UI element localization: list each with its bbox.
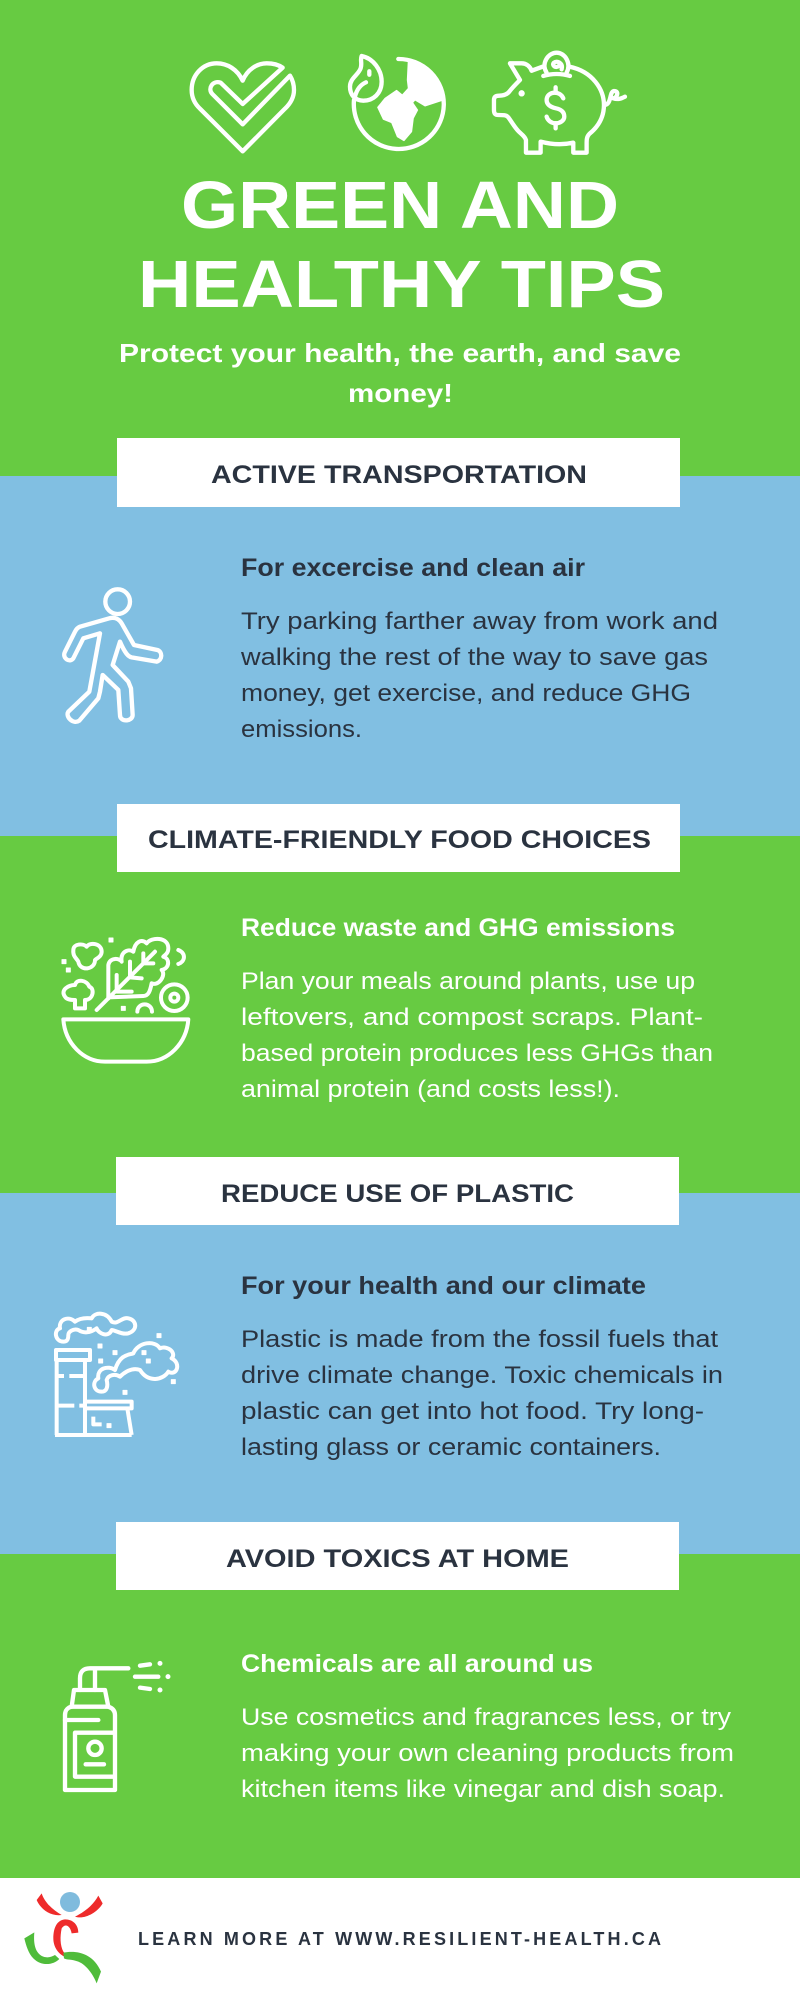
body text: making your own cleaning products from [241,1740,734,1767]
icon: salad bowl [62,938,188,1062]
body text: based protein produces less GHGs than [241,1040,713,1067]
subheading: Chemicals are all around us [241,1650,593,1678]
heading bar: toxics [116,1522,679,1590]
panel: reduce use of plastic [0,1157,800,1554]
subtitle: money! [348,378,453,408]
panel: footer [0,1878,800,2000]
body text: Try parking farther away from work and [241,608,718,635]
subtitle: Protect your health, the earth, and save [119,338,681,368]
subheading: For your health and our climate [241,1272,646,1300]
body text: drive climate change. Toxic chemicals in [241,1362,723,1389]
icon: walking person [64,589,161,722]
title [138,168,665,322]
body text: plastic can get into hot food. Try long- [241,1398,704,1425]
subheading: Reduce waste and GHG emissions [241,914,675,942]
body text: walking the rest of the way to save gas [240,644,708,671]
icon: heart with check [192,63,294,151]
heading bar: active transportation: ACTIVE TRANSPORTATION [211,461,587,489]
body text: leftovers, and compost scraps. Plant- [241,1004,703,1031]
heading bar: food choices [117,804,680,872]
subheading: For excercise and clean air [241,554,585,582]
body text [240,608,718,743]
body text: Use cosmetics and fragrances less, or try [241,1704,731,1731]
body text: animal protein (and costs less!). [241,1076,620,1103]
icon: earth with leaf [350,56,444,149]
panel: climate-friendly food choices [0,804,800,1194]
body text: kitchen items like vinegar and dish soap. [241,1776,725,1803]
body text: Plastic is made from the fossil fuels that [241,1326,718,1353]
body text [241,1704,734,1803]
heading bar: food choices: CLIMATE-FRIENDLY FOOD CHOICES [148,826,651,854]
body text: Plan your meals around plants, use up [241,968,695,995]
body text: lasting glass or ceramic containers. [241,1434,661,1461]
icon: factory smoke [55,1314,177,1435]
heading bar: plastic: REDUCE USE OF PLASTIC [221,1180,574,1208]
body text [241,1326,723,1461]
logo: resilient health figure [24,1892,103,1983]
heading bar: active transportation [117,438,680,507]
body text: emissions. [241,716,362,743]
footer call to action: LEARN MORE AT WWW.RESILIENT-HEALTH.CA [138,1929,661,1949]
panel: active transportation [0,438,800,836]
body text: money, get exercise, and reduce GHG [241,680,691,707]
icon: piggy bank [494,53,625,153]
heading bar: toxics: AVOID TOXICS AT HOME [226,1545,569,1573]
heading bar: plastic [116,1157,679,1225]
body text [241,968,713,1103]
panel: header [0,0,800,477]
icon: spray bottle [65,1661,170,1790]
subtitle [119,338,681,408]
panel: avoid toxics at home [0,1522,800,1878]
title: GREEN AND [181,168,619,243]
title: HEALTHY TIPS [138,247,665,322]
